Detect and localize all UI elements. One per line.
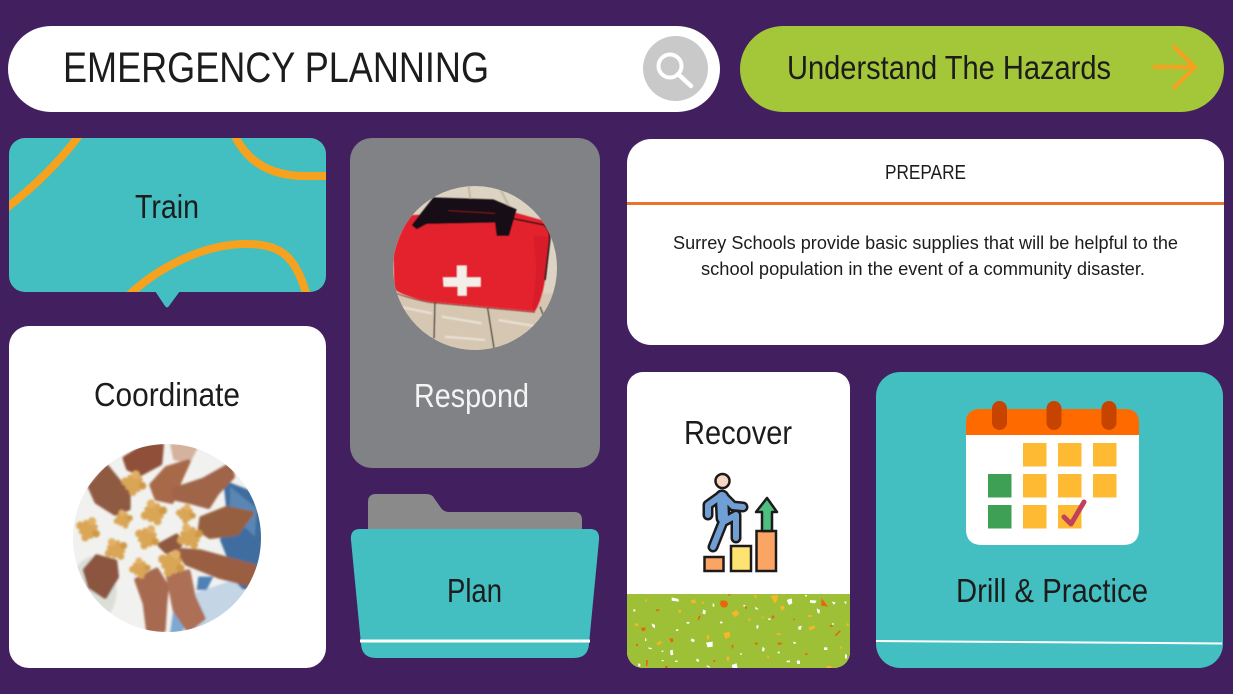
drill and practice label: Drill & Practice <box>956 572 1148 609</box>
panel: train <box>5 133 330 308</box>
respond label: Respond <box>414 377 529 414</box>
icon: calendar <box>966 401 1139 545</box>
panel: recover <box>627 372 850 668</box>
title: EMERGENCY PLANNING <box>63 44 489 92</box>
prepare heading: PREPARE <box>885 162 966 184</box>
prepare body text: school population in the event of a community disaster. <box>701 259 1145 279</box>
icon: person climbing steps <box>704 474 777 571</box>
panel: coordinate <box>9 326 326 668</box>
button: understand the hazards <box>740 26 1224 112</box>
panel: respond <box>350 138 600 468</box>
search bar <box>8 26 720 112</box>
prepare body text: Surrey Schools provide basic supplies that will be helpful to the <box>673 233 1178 253</box>
panel: drill and practice <box>876 372 1223 668</box>
terrazzo strip <box>627 594 850 668</box>
panel: prepare <box>627 139 1224 345</box>
panel: plan folder <box>351 494 599 658</box>
photo: hands holding puzzle pieces <box>70 443 267 633</box>
plan label: Plan <box>447 572 502 609</box>
icon: search magnifier <box>643 36 708 101</box>
recover label: Recover <box>684 414 792 451</box>
train label: Train <box>135 188 199 225</box>
icon: arrow <box>1153 46 1195 89</box>
coordinate label: Coordinate <box>94 376 240 413</box>
button label: Understand The Hazards <box>787 49 1111 86</box>
photo: red first aid bag <box>392 185 558 357</box>
